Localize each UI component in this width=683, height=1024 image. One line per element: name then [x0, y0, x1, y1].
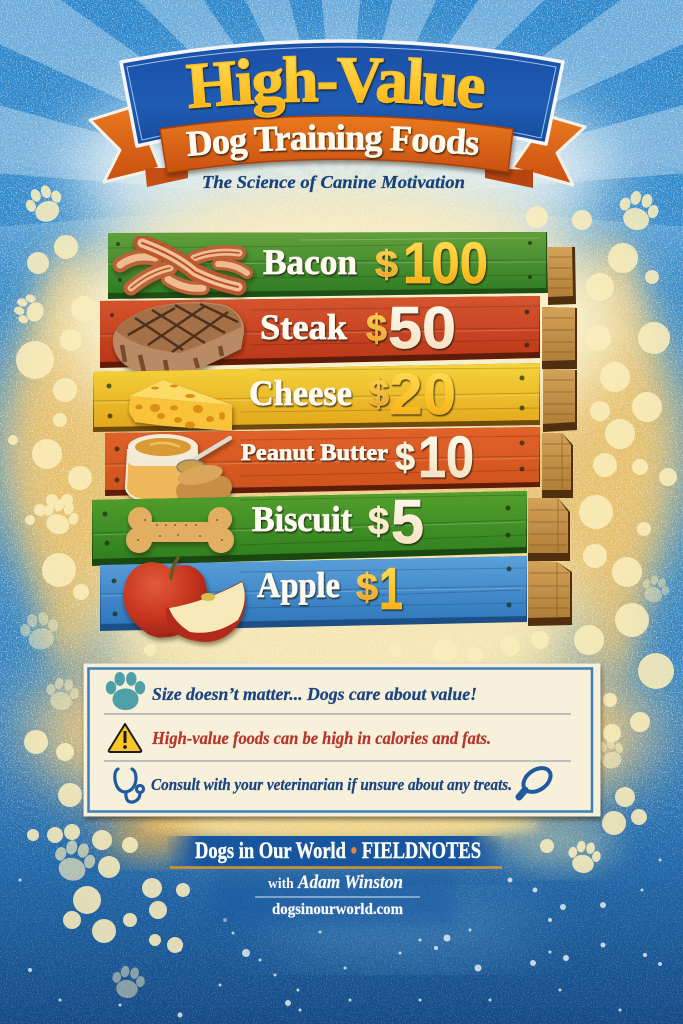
blue banner — [121, 41, 563, 146]
label: Biscuit: Biscuit — [252, 499, 352, 539]
footer brand line: Dogs in Our World • FIELDNOTES — [195, 838, 481, 863]
value: $100 — [375, 231, 488, 296]
value: $20: 20 — [389, 361, 456, 427]
plank: peanut butter — [105, 425, 573, 505]
star speckles — [18, 858, 662, 1018]
icon: paw — [106, 672, 145, 710]
label: Peanut Butter: Peanut Butter — [241, 440, 388, 465]
value: $10: 10 — [418, 425, 474, 490]
footer author: with Adam Winston — [268, 872, 403, 893]
footer url: dogsinourworld.com — [272, 901, 404, 918]
icon: stethoscope — [115, 769, 144, 802]
value: $5 — [368, 488, 424, 557]
icon: peanut butter jar — [126, 434, 232, 505]
tagline: The Science of Canine Motivation — [202, 172, 465, 192]
panel: tips — [84, 664, 600, 816]
value: $10: $ — [395, 437, 415, 479]
icon: steak — [113, 302, 244, 378]
plank: biscuit — [92, 488, 570, 566]
title banner — [88, 39, 586, 192]
value: $1 — [356, 556, 403, 622]
plank: bacon — [108, 231, 576, 305]
orange plank — [160, 116, 513, 173]
title: High-Value: High-Value — [185, 56, 486, 120]
tip: size doesn't matter: Size doesn’t matter... Dogs care about value! — [152, 684, 477, 704]
tip: calories warning: High-value foods can be high in calories and fats. — [151, 728, 491, 748]
value: $100: 100 — [403, 231, 488, 296]
icon: warning triangle — [109, 724, 141, 752]
subtitle: Dog Training Foods: Dog Training Foods — [186, 124, 480, 163]
label: Steak: Steak — [260, 307, 347, 347]
footer — [165, 836, 505, 925]
value: $5: 5 — [391, 488, 424, 557]
icon: dog bone biscuit — [126, 507, 234, 553]
value: $20: $ — [368, 373, 389, 415]
label: Apple: Apple — [257, 565, 340, 605]
tip: consult vet: Consult with your veterinarian if unsure about any treats. — [151, 775, 512, 794]
ribbon tails — [90, 106, 585, 188]
label: Bacon: Bacon — [263, 242, 357, 282]
icon: cheese — [129, 380, 232, 431]
value: $50: 50 — [388, 295, 456, 361]
plank: steak — [100, 295, 577, 378]
bokeh dots and paw prints — [8, 181, 677, 1001]
icon: magnifier — [519, 763, 555, 797]
value: $1: $ — [356, 567, 378, 609]
icon: apple — [123, 558, 245, 642]
plank: cheese — [93, 361, 577, 432]
value: $1: 1 — [379, 556, 403, 622]
value: $50: $ — [366, 308, 387, 350]
plank: apple — [100, 556, 572, 642]
icon: bacon — [120, 243, 247, 288]
value: $5: $ — [368, 501, 389, 543]
value: $10 — [395, 425, 474, 490]
label: Cheese: Cheese — [249, 373, 352, 413]
value: $100: $ — [375, 244, 398, 286]
